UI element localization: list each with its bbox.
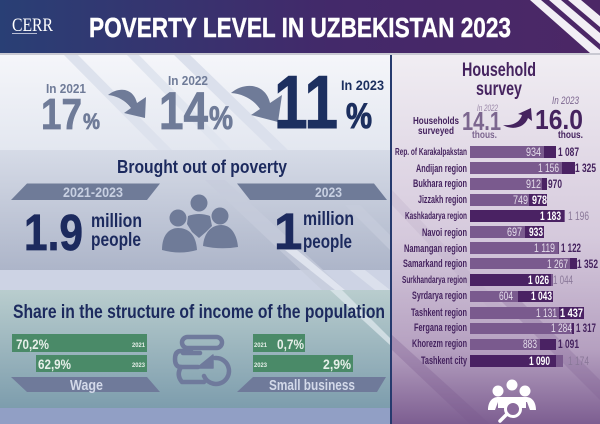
row: Khorezm — [412, 338, 579, 351]
row: Andijan: 1 156 — [538, 163, 559, 175]
stat: 2023 households: 16.0 — [535, 104, 583, 135]
stat: 2023 households: thous. — [558, 130, 583, 141]
banner: 2021-2023: 2021-2023 — [63, 184, 123, 200]
number: 17%: % — [83, 109, 100, 134]
bar: small business 2021 — [253, 334, 305, 352]
row: Navoi: 933 — [529, 227, 543, 239]
row: Karakalpakstan: 1 087 — [558, 147, 579, 159]
row: Syrdarya: 1 043 — [531, 291, 552, 303]
row: Syrdarya: 604 — [499, 291, 513, 303]
stat: 1 million people: people — [303, 232, 352, 253]
row: Khorezm: Khorezm region — [412, 338, 467, 350]
heading: household survey: Household — [462, 60, 536, 81]
row: Khorezm: 1 091 — [558, 339, 579, 351]
row: Tashkent city: 1 090 — [529, 356, 550, 368]
panel: brought out of poverty — [0, 150, 390, 290]
row: Surkhandarya: Surkhandarya region — [402, 275, 467, 286]
row: Khorezm: 883 — [523, 339, 537, 351]
icon: people with magnifier — [488, 380, 536, 421]
arrow: 2022 to 2023 — [231, 86, 282, 122]
row: Jizzakh: 978 — [532, 195, 547, 207]
row: Tashkent city: Tashkent city — [421, 355, 468, 367]
label: households surveyed: surveyed — [418, 125, 454, 137]
label: households surveyed — [413, 115, 459, 137]
row: Tashkent city — [421, 355, 589, 368]
stat: 2022 households: In 2022 — [477, 103, 498, 113]
row: Jizzakh: 749 — [513, 195, 528, 207]
stat: 2022 households: thous. — [472, 130, 497, 141]
heading: household survey: survey — [476, 79, 522, 100]
row: Namangan — [404, 242, 581, 255]
number: 14%: 14 — [159, 82, 208, 141]
header banner — [0, 0, 600, 55]
banner: small business: Small business — [269, 377, 355, 394]
decorative corner stripes — [530, 0, 600, 53]
heading: household survey — [462, 60, 536, 100]
bar: small business 2023: 2023 — [254, 363, 268, 369]
panel: share in income structure — [0, 290, 390, 424]
row: Namangan: 1 119 — [534, 243, 555, 255]
row: Kashkadarya — [405, 210, 589, 223]
row: Samarkand: 1 267 — [547, 259, 568, 271]
stat: 1.9 million people: people — [91, 230, 141, 251]
icon: coins and pie — [175, 337, 229, 384]
row: Surkhandarya: 1 026 — [528, 275, 549, 287]
divider: panel separator — [390, 53, 392, 424]
row: Fergana: 1 284 — [551, 323, 572, 335]
row: Navoi: 697 — [507, 227, 522, 239]
row: Jizzakh: Jizzakh region — [418, 194, 467, 206]
text: in 2022: In 2022 — [168, 73, 208, 88]
stat: 2022 households — [462, 103, 501, 141]
stat: 1 million people — [274, 203, 354, 260]
text: in 2023: In 2023 — [341, 77, 384, 93]
row: Bukhara: Bukhara region — [413, 178, 467, 190]
bar: wage 2021: 70,2% — [16, 336, 49, 352]
arrow: 2022 to 2023 households — [503, 108, 532, 128]
row: Namangan: Namangan region — [404, 243, 467, 255]
bar: wage 2023: 2023 — [132, 363, 146, 369]
row: Karakalpakstan: Rep. of Karakalpakstan — [395, 147, 467, 158]
row: Samarkand: Samarkand region — [403, 258, 467, 270]
bar: wage 2023 — [36, 355, 147, 372]
banner: 2023 — [237, 184, 387, 200]
panel: household survey — [392, 53, 600, 424]
row: Bukhara — [413, 178, 562, 191]
row: Kashkadarya: Kashkadarya region — [405, 211, 467, 222]
banner: wage: Wage — [70, 377, 103, 394]
row: Surkhandarya: 1 044 — [553, 275, 573, 287]
text: in 2021: In 2021 — [46, 81, 86, 96]
bar: wage 2021: 2021 — [132, 343, 146, 349]
chart: regional bars — [395, 146, 598, 368]
banner: 2021-2023 — [11, 184, 160, 200]
row: Navoi: Navoi region — [422, 227, 467, 239]
panel: poverty level — [0, 53, 390, 150]
row: Samarkand — [403, 258, 598, 271]
row: Syrdarya — [412, 290, 553, 303]
banner: 2023: 2023 — [315, 184, 342, 200]
row: Kashkadarya: 1 183 — [540, 211, 561, 223]
bar: small business 2023: 2,9% — [323, 356, 351, 372]
row: Tashkent: Tashkent region — [411, 307, 467, 319]
row: Kashkadarya: 1 196 — [568, 211, 589, 223]
heading: share in the structure: Share in the structure of income of the population — [13, 302, 385, 323]
icon: group of people — [162, 194, 238, 252]
title: POVERTY LEVEL IN UZBEKISTAN 2023 — [89, 12, 511, 43]
row: Namangan: 1 122 — [561, 243, 581, 255]
number: 11%: % — [346, 97, 372, 136]
row: Tashkent — [411, 307, 584, 320]
stat: 1.9 million people: million — [91, 211, 142, 232]
row: Navoi — [422, 226, 544, 239]
number: 14%: % — [209, 100, 233, 136]
stat: 1 million people: 1 — [274, 203, 302, 260]
stat: 1 million people: million — [303, 209, 354, 230]
row: Andijan — [416, 162, 596, 175]
row: Bukhara: 912 — [526, 179, 541, 191]
row: Tashkent: 1 437 — [560, 308, 583, 320]
bar: small business 2021: 0,7% — [277, 336, 304, 352]
row: Fergana: Fergana region — [414, 322, 467, 334]
bar: small business 2023 — [253, 355, 353, 372]
row: Syrdarya: Syrdarya region — [412, 290, 467, 302]
arrow: 2021 to 2022 — [108, 90, 146, 118]
banner: wage — [11, 377, 160, 394]
stat: 2022 households: 14.1 — [462, 106, 501, 136]
bar: small business 2021: 2021 — [254, 343, 268, 349]
stat: 1.9 million people: 1.9 — [24, 204, 83, 261]
row: Andijan: Andijan region — [416, 163, 467, 175]
row: Surkhandarya — [402, 274, 573, 287]
row: Jizzakh — [418, 194, 547, 207]
stat: 2023 households — [535, 95, 583, 141]
logo: CERR: CERR — [12, 15, 53, 36]
stat: 2023 households: In 2023 — [552, 95, 580, 107]
number: 11%: 11 — [274, 60, 338, 144]
row: Bukhara: 970 — [548, 179, 562, 191]
bar: wage 2023: 62,9% — [38, 356, 71, 372]
row: Karakalpakstan: 934 — [526, 147, 541, 159]
row: Tashkent: 1 131 — [536, 308, 557, 320]
heading: brought out of poverty: Brought out of poverty — [117, 157, 287, 177]
stat: 1.9 million people — [24, 204, 142, 261]
row: Fergana — [414, 322, 596, 335]
label: households surveyed: Households — [413, 115, 459, 127]
row: Tashkent city: 1 174 — [568, 356, 589, 368]
number: 17%: 17 — [41, 90, 82, 139]
bar: wage 2021 — [12, 334, 147, 352]
row: Karakalpakstan — [395, 146, 579, 159]
